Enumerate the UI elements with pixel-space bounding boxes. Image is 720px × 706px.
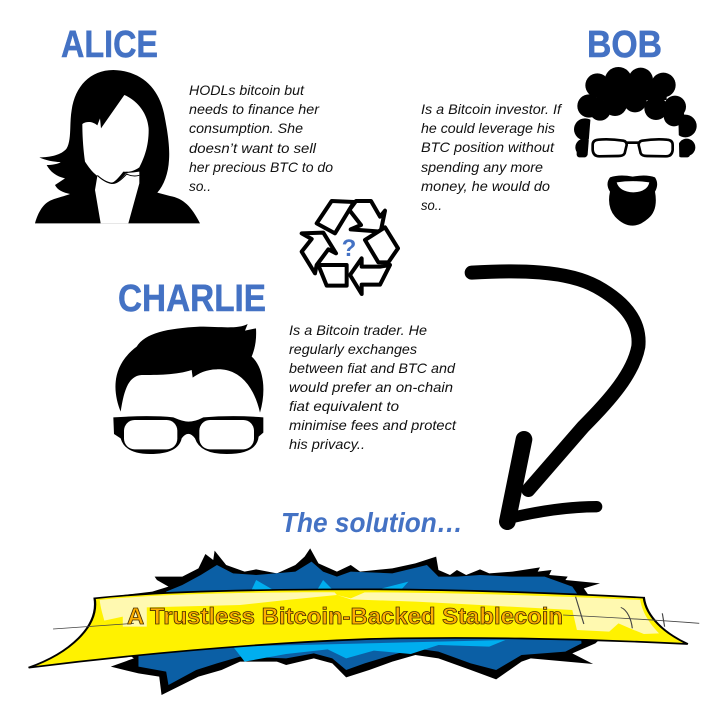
text: Charlie description — [289, 322, 457, 452]
text: Bob description: money, he would do — [421, 178, 550, 194]
text: Charlie description: fiat equivalent to — [289, 398, 399, 414]
text: Charlie description: regularly exchanges — [289, 341, 417, 357]
heading: Alice: ALICE — [61, 24, 158, 66]
text: Alice description: needs to finance her — [189, 101, 320, 117]
burst: light blue accents — [233, 640, 505, 662]
heading: Bob: BOB — [587, 24, 662, 66]
icon: Bob face — [574, 67, 697, 226]
text: Charlie description: between fiat and BTC and — [289, 360, 456, 376]
text: Charlie description: would prefer an on-chain — [289, 379, 453, 395]
icon: recycling symbol with question mark: ? — [342, 235, 356, 262]
text: Alice description: so.. — [189, 178, 211, 194]
text: Alice description: HODLs bitcoin but — [189, 82, 305, 98]
icon: Alice silhouette — [35, 70, 200, 223]
banner: burst with yellow ribbon — [29, 548, 699, 695]
text: Charlie description: his privacy.. — [289, 436, 365, 452]
text: Alice description: doesn’t want to sell — [189, 140, 317, 156]
text: Charlie description: Is a Bitcoin trader. He — [289, 322, 427, 338]
text: Charlie description: minimise fees and protect — [289, 417, 457, 433]
ribbon: highlight — [100, 592, 659, 634]
text: Bob description — [421, 101, 563, 213]
arrow: hand-drawn curved arrow — [472, 271, 639, 522]
burst: dark blue fill — [138, 562, 582, 685]
text: Alice description — [189, 82, 333, 194]
text: Alice description: her precious BTC to do — [189, 159, 333, 175]
banner text: A Trustless Bitcoin-Backed Stablecoin — [127, 603, 563, 629]
text: Alice description: consumption. She — [189, 120, 303, 136]
icon: recycling symbol with question mark — [302, 201, 398, 294]
text: Bob description: Is a Bitcoin investor. If — [421, 101, 563, 117]
text: Bob description: so.. — [421, 197, 442, 213]
text: Bob description: spending any more — [421, 159, 543, 175]
text: Bob description: BTC position without — [421, 139, 555, 155]
ribbon: scratch lines — [53, 597, 699, 629]
burst: black spikes — [95, 548, 644, 695]
icon: Charlie face — [113, 324, 263, 454]
text: Bob description: he could leverage his — [421, 120, 555, 136]
heading: Charlie: CHARLIE — [118, 278, 266, 320]
heading: the solution: The solution… — [281, 507, 463, 538]
ribbon: yellow band — [29, 589, 688, 668]
